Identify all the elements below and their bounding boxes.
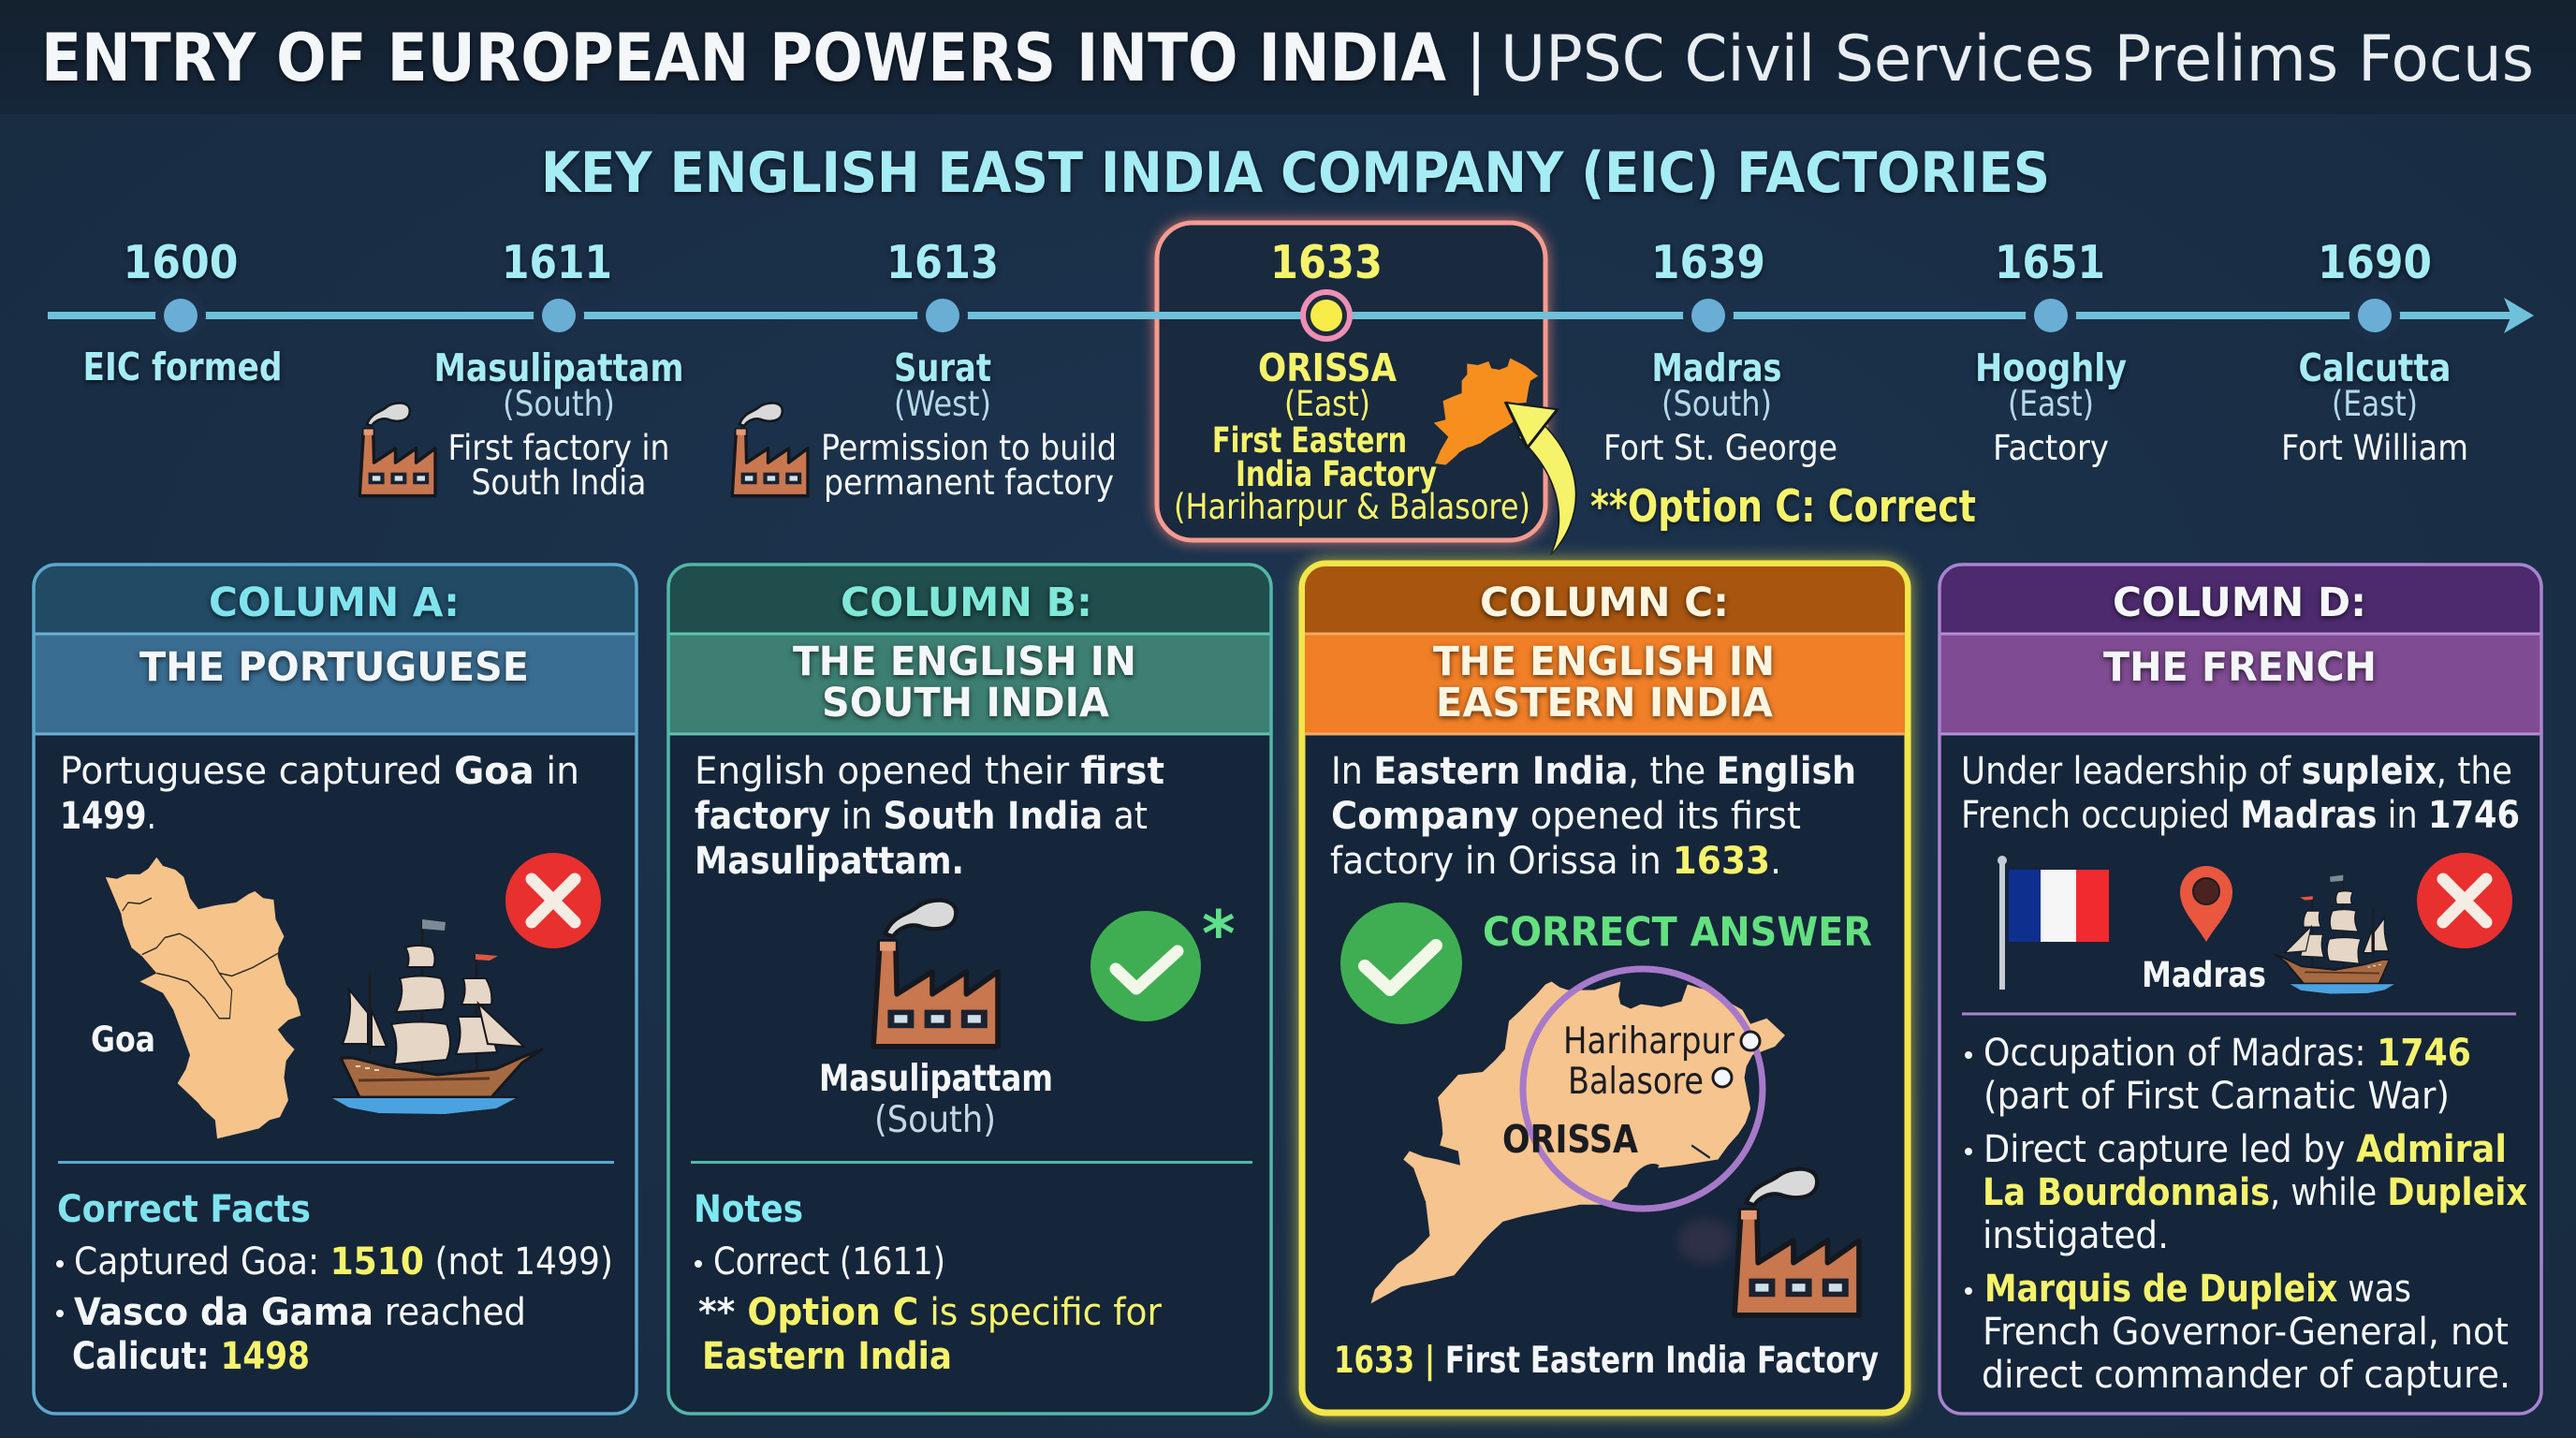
heading: column B: SOUTH INDIA bbox=[822, 680, 1110, 726]
timeline entry: 1633 Orissa: (Hariharpur & Balasore) bbox=[1174, 487, 1530, 527]
panel: column D the French bbox=[1939, 565, 2541, 1414]
icon: map pin bbox=[2180, 866, 2232, 942]
icon: green check: * bbox=[1202, 898, 1236, 972]
timeline entry: 1613 Surat: Surat bbox=[894, 345, 991, 390]
statement A bbox=[60, 750, 579, 838]
statement C: Company opened its first bbox=[1331, 795, 1801, 838]
panel: column B the English in South India bbox=[668, 565, 1271, 1414]
statement C bbox=[1330, 750, 1856, 883]
timeline entry: 1690 Calcutta: Fort William bbox=[2281, 428, 2468, 468]
timeline entry: 1600 bbox=[82, 236, 283, 389]
icon: factory Masulipattam bbox=[873, 901, 998, 1047]
heading: column B: COLUMN B: bbox=[841, 580, 1092, 626]
timeline entry: 1633 Orissa: ORISSA bbox=[1258, 345, 1397, 390]
text block: French facts: instigated. bbox=[1983, 1214, 2169, 1257]
timeline entry: 1651 Hooghly bbox=[1975, 236, 2127, 468]
statement A: Portuguese captured Goa in bbox=[60, 750, 579, 793]
timeline entry: 1611 Masulipattam: Masulipattam bbox=[434, 345, 683, 390]
timeline entry: 1633 Orissa: First Eastern bbox=[1212, 420, 1407, 461]
title bar: ENTRY OF EUROPEAN POWERS INTO INDIA bbox=[41, 20, 1446, 96]
text block: French facts: La Bourdonnais, while Dupleix bbox=[1983, 1171, 2527, 1214]
timeline entry: 1651 Hooghly: 1651 bbox=[1995, 236, 2105, 289]
icon: ship bbox=[332, 919, 542, 1114]
statement A: 1499. bbox=[60, 795, 156, 838]
timeline entry: 1611 Masulipattam: 1611 bbox=[502, 236, 612, 289]
arrow: option C to Orissa bbox=[1506, 403, 1576, 555]
map labels: Hariharpur, Balasore, Orissa bbox=[1502, 1020, 1760, 1162]
text block: correct facts: Correct Facts bbox=[57, 1188, 311, 1231]
timeline entry: 1651 Hooghly: Hooghly bbox=[1975, 345, 2127, 390]
label: Masulipattam South: Masulipattam bbox=[819, 1058, 1053, 1100]
heading: column A: THE PORTUGUESE bbox=[139, 644, 529, 691]
label: correct answer: CORRECT ANSWER bbox=[1483, 909, 1872, 956]
text block: notes: Correct (1611) bbox=[713, 1240, 945, 1284]
timeline entry: 1690 Calcutta bbox=[2281, 236, 2468, 468]
label: Masulipattam South: (South) bbox=[874, 1099, 996, 1141]
map labels: Hariharpur, Balasore, Orissa: Hariharpur bbox=[1563, 1020, 1735, 1063]
timeline entry: 1639 Madras: (South) bbox=[1661, 384, 1772, 424]
text block: French facts: (part of First Carnatic War) bbox=[1983, 1075, 2450, 1118]
label: Madras: Madras bbox=[2142, 955, 2266, 995]
timeline nodes bbox=[155, 290, 2400, 341]
text block: notes: ** Option C is specific for bbox=[698, 1291, 1163, 1334]
icon: factory Orissa bbox=[1734, 1169, 1859, 1315]
panel: column C the English in Eastern India bbox=[1302, 564, 1908, 1413]
timeline axis and arrow bbox=[48, 298, 2534, 333]
timeline entry: 1611 Masulipattam: South India bbox=[472, 462, 646, 503]
statement B: Masulipattam. bbox=[695, 840, 964, 883]
heading: column B bbox=[793, 580, 1136, 726]
timeline entry: 1613 Surat: Permission to build bbox=[821, 428, 1117, 468]
heading: column A bbox=[139, 580, 529, 691]
timeline entry: 1639 Madras: 1639 bbox=[1651, 236, 1765, 289]
text block: notes: Notes bbox=[694, 1188, 803, 1231]
statement C: In Eastern India, the English bbox=[1331, 750, 1856, 793]
timeline entry: 1611 Masulipattam: (South) bbox=[503, 384, 615, 424]
statement D bbox=[1961, 750, 2520, 837]
text block: notes: Eastern India bbox=[702, 1335, 952, 1378]
statement B: factory in South India at bbox=[695, 795, 1148, 838]
heading: column B: THE ENGLISH IN bbox=[793, 638, 1136, 685]
icon: green check bbox=[1090, 898, 1236, 1021]
icon: green check large bbox=[1340, 902, 1462, 1024]
heading: column A: COLUMN A: bbox=[209, 580, 460, 626]
timeline entry: 1613 Surat: permanent factory bbox=[824, 462, 1114, 503]
caption: first eastern India factory: 1633 | First Eastern India Factory bbox=[1334, 1340, 1879, 1382]
icon: red cross bbox=[505, 853, 601, 948]
text block: correct facts: Calicut: 1498 bbox=[72, 1335, 310, 1378]
label: Masulipattam South bbox=[819, 1058, 1053, 1141]
timeline entry: 1611 Masulipattam: First factory in bbox=[447, 428, 670, 468]
timeline entry: 1600: 1600 bbox=[124, 236, 238, 289]
statement C: factory in Orissa in 1633. bbox=[1330, 840, 1781, 883]
title bar: UPSC Civil Services Prelims Focus bbox=[1500, 22, 2534, 96]
timeline entry: 1639 Madras: Madras bbox=[1651, 345, 1782, 390]
text block: French facts: direct commander of capture. bbox=[1982, 1354, 2510, 1397]
timeline entry: 1633 Orissa bbox=[1174, 236, 1530, 527]
text block: French facts: Marquis de Dupleix was bbox=[1984, 1268, 2411, 1311]
timeline entry: 1600: EIC formed bbox=[82, 345, 283, 389]
timeline entry: 1690 Calcutta: 1690 bbox=[2318, 236, 2432, 289]
statement D: Under leadership of supleix, the bbox=[1961, 750, 2512, 793]
timeline entry: 1651 Hooghly: (East) bbox=[2008, 384, 2094, 424]
timeline entry: 1613 Surat: 1613 bbox=[886, 236, 999, 289]
icon: French flag bbox=[1998, 856, 2109, 990]
statement B: English opened their first bbox=[695, 750, 1164, 793]
panel: column A the Portuguese bbox=[34, 565, 637, 1414]
heading: column D: COLUMN D: bbox=[2113, 580, 2366, 626]
heading: column C: THE ENGLISH IN bbox=[1433, 638, 1775, 685]
timeline entry: 1690 Calcutta: Calcutta bbox=[2299, 345, 2451, 390]
icon: factory 1613 bbox=[732, 403, 808, 496]
title bar bbox=[0, 0, 2576, 114]
icon: ship flipped bbox=[2275, 875, 2394, 994]
timeline entry: 1613 Surat bbox=[821, 236, 1117, 503]
heading: column C: EASTERN INDIA bbox=[1436, 680, 1774, 726]
highlight circle bbox=[1523, 969, 1763, 1209]
title bar: | bbox=[1466, 22, 1486, 96]
section heading: KEY ENGLISH EAST INDIA COMPANY (EIC) FACTORIES bbox=[541, 140, 2050, 206]
timeline entry: 1639 Madras: Fort St. George bbox=[1603, 428, 1837, 468]
timeline entry: 1651 Hooghly: Factory bbox=[1993, 428, 2109, 468]
icon: factory 1611 bbox=[359, 403, 435, 496]
text block: French facts bbox=[1965, 1032, 2527, 1397]
statement D: French occupied Madras in 1746 bbox=[1961, 794, 2520, 837]
timeline entry: 1611 Masulipattam bbox=[434, 236, 683, 503]
timeline entry: 1633 Orissa: India Factory bbox=[1236, 454, 1437, 494]
text block: notes bbox=[694, 1188, 1163, 1378]
heading: column D bbox=[2103, 580, 2377, 691]
map labels: Hariharpur, Balasore, Orissa: Balasore bbox=[1568, 1061, 1704, 1103]
heading: column C: COLUMN C: bbox=[1480, 580, 1729, 626]
text block: correct facts bbox=[56, 1188, 613, 1378]
icon: Orissa map orange bbox=[1434, 359, 1538, 465]
timeline node: 1633 highlighted bbox=[1300, 289, 1353, 342]
text block: French facts: Occupation of Madras: 1746 bbox=[1983, 1032, 2471, 1075]
text block: correct facts: Captured Goa: 1510 (not 1499) bbox=[74, 1240, 613, 1284]
timeline entry: 1639 Madras bbox=[1603, 236, 1837, 468]
text block: French facts: French Governor-General, not bbox=[1983, 1311, 2509, 1354]
text block: correct facts: Vasco da Gama reached bbox=[74, 1291, 526, 1334]
callout: option C correct: **Option C: Correct bbox=[1590, 481, 1976, 533]
text block: French facts: Direct capture led by Admiral bbox=[1983, 1128, 2507, 1171]
timeline entry: 1690 Calcutta: (East) bbox=[2332, 384, 2418, 424]
icon: Goa map bbox=[106, 858, 300, 1138]
heading: column C bbox=[1433, 580, 1775, 726]
timeline highlight box: 1633 bbox=[1157, 223, 1545, 540]
map labels: Hariharpur, Balasore, Orissa: ORISSA bbox=[1502, 1117, 1638, 1162]
statement B bbox=[695, 750, 1164, 883]
icon: red cross bbox=[2417, 853, 2512, 948]
timeline entry: 1633 Orissa: 1633 bbox=[1270, 236, 1383, 289]
timeline entry: 1633 Orissa: (East) bbox=[1284, 384, 1370, 424]
timeline entry: 1613 Surat: (West) bbox=[894, 384, 991, 424]
heading: column D: THE FRENCH bbox=[2103, 644, 2377, 691]
icon: Orissa map bbox=[1371, 982, 1785, 1303]
label: Goa: Goa bbox=[91, 1020, 155, 1060]
